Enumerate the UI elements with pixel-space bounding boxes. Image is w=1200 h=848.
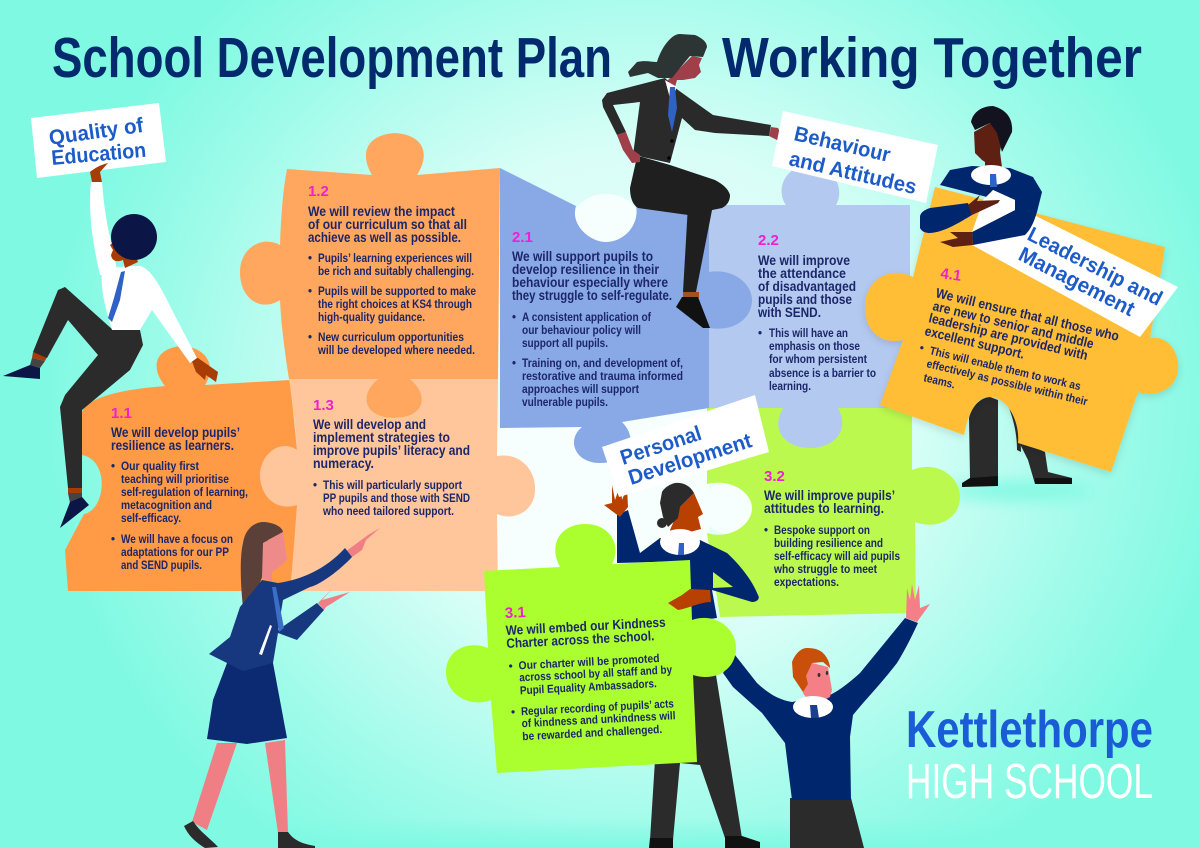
- text block 1.1: We will develop pupils’: [111, 425, 240, 440]
- text block 2.2: This will have an: [769, 328, 848, 340]
- text block 2.2: of disadvantaged: [758, 279, 856, 294]
- floor glow: [0, 818, 1200, 848]
- text block 1.1: metacognition and: [121, 500, 212, 512]
- person: top woman sitting: [602, 34, 786, 328]
- logo: [906, 701, 1153, 809]
- text block 3.1: •: [508, 661, 513, 673]
- text block 1.2: •: [308, 253, 312, 265]
- sign: leadership and management: Management: [1015, 243, 1138, 321]
- sign: quality of education: [31, 103, 166, 178]
- text block 2.1: 2.1: [512, 229, 533, 246]
- text block 1.3: PP pupils and those with SEND: [323, 493, 470, 505]
- text block 2.2: emphasis on those: [769, 341, 860, 353]
- person: man holding piece 4.1, torso and head: [920, 106, 1042, 247]
- text block 1.2: •: [308, 332, 312, 344]
- text block 1.1: •: [111, 461, 115, 473]
- text block 3.1: of kindness and unkindness will: [521, 710, 676, 730]
- sign: leadership and management: Leadership and: [1024, 223, 1166, 311]
- text block 4.1: This will enable them to work as: [928, 345, 1082, 393]
- text block 1.1: self-regulation of learning,: [121, 487, 248, 499]
- sign: personal development: Development: [626, 429, 755, 490]
- text block 2.1: our behaviour policy will: [522, 325, 641, 337]
- puzzle piece 3.2: [707, 408, 960, 617]
- text block 3.1: Our charter will be promoted: [518, 653, 660, 672]
- text block 2.2: pupils and those: [758, 292, 852, 307]
- text block 2.1: •: [512, 312, 516, 324]
- text block 4.1: •: [918, 342, 925, 355]
- text block 1.2: Pupils’ learning experiences will: [318, 253, 472, 265]
- sign: quality of education: Quality of: [47, 114, 146, 150]
- text block 3.2: We will improve pupils’: [764, 488, 895, 503]
- text block 1.3: This will particularly support: [323, 480, 462, 492]
- text block 2.1: Training on, and development of,: [522, 358, 683, 370]
- text block 2.2: with SEND.: [757, 305, 821, 320]
- text block 3.1: 3.1: [504, 604, 526, 622]
- text block 2.1: [512, 229, 683, 409]
- text block 4.1: effectively as possible within their: [925, 358, 1089, 409]
- text block 4.1: 4.1: [939, 265, 962, 285]
- text block 3.2: Bespoke support on: [774, 525, 870, 537]
- text block 4.1: leadership are provided with: [927, 310, 1089, 363]
- text block 3.1: be rewarded and challenged.: [522, 724, 662, 743]
- text block 3.1: •: [511, 707, 515, 719]
- text block 4.1: are new to senior and middle: [931, 298, 1096, 352]
- puzzle piece 1.2: [240, 133, 500, 418]
- sign: behaviour and attitudes: [772, 111, 938, 203]
- sign: personal development: [602, 395, 769, 497]
- sign: leadership and management: [972, 213, 1178, 337]
- sign: behaviour and attitudes: and Attitudes: [787, 147, 919, 199]
- text block 2.2: [757, 232, 876, 393]
- text block 3.2: [764, 468, 900, 589]
- text block 1.2: 1.2: [308, 183, 329, 200]
- text block 4.1: [918, 265, 1121, 409]
- text block 2.1: develop resilience in their: [512, 262, 660, 277]
- text block 1.1: self-efficacy.: [121, 513, 181, 525]
- puzzle piece 1.3: [260, 379, 535, 591]
- text block 2.1: vulnerable pupils.: [522, 397, 608, 409]
- text block 2.2: the attendance: [758, 266, 846, 281]
- text block 3.1: Pupil Equality Ambassadors.: [520, 678, 657, 697]
- text block 2.2: absence is a barrier to: [769, 368, 876, 380]
- text block 1.1: 1.1: [111, 405, 132, 422]
- person: man holding piece 4.1, legs: [962, 397, 1072, 487]
- text block 3.1: Regular recording of pupils’ acts: [521, 698, 674, 718]
- text block 1.3: implement strategies to: [313, 430, 450, 445]
- text block 1.3: [313, 397, 470, 518]
- hand on piece 3.1: [668, 589, 711, 610]
- text block 2.2: We will improve: [758, 253, 850, 268]
- text block 3.1: We will embed our Kindness: [505, 615, 666, 638]
- text block 3.2: expectations.: [774, 577, 839, 589]
- text block 3.2: self-efficacy will aid pupils: [774, 551, 900, 563]
- text block 1.1: adaptations for our PP: [121, 547, 229, 559]
- text block 1.2: Pupils will be supported to make: [318, 286, 476, 298]
- text block 1.1: Our quality first: [121, 461, 199, 473]
- text block 3.2: •: [764, 525, 768, 537]
- sign: quality of education: Education: [50, 139, 147, 170]
- text block 4.1: teams.: [922, 372, 956, 391]
- text block 3.1: across school by all staff and by: [519, 664, 673, 684]
- text block 2.2: 2.2: [758, 232, 779, 249]
- text block 2.2: for whom persistent: [769, 354, 867, 366]
- puzzle piece 1.1: [65, 346, 297, 591]
- text block 1.2: will be developed where needed.: [317, 345, 475, 357]
- text block 2.2: learning.: [769, 381, 811, 393]
- text block 3.1: [504, 596, 676, 744]
- text block 2.1: A consistent application of: [522, 312, 651, 324]
- text block 2.1: behaviour especially where: [512, 275, 668, 290]
- person: personal development woman: [604, 483, 760, 848]
- text block 1.2: the right choices at KS4 through: [318, 299, 472, 311]
- white puzzle piece: [497, 194, 754, 620]
- text block 2.2: •: [758, 328, 762, 340]
- puzzle piece 4.1: [865, 187, 1178, 472]
- ground shadow: [945, 482, 1095, 500]
- text block 1.3: We will develop and: [313, 417, 426, 432]
- text block 1.1: [111, 405, 248, 572]
- text block 2.1: they struggle to self-regulate.: [512, 288, 672, 303]
- text block 4.1: excellent support.: [923, 323, 1026, 362]
- text block 2.1: restorative and trauma informed: [522, 371, 683, 383]
- text block 2.1: We will support pupils to: [512, 249, 653, 264]
- person: boy with raised arms: [723, 584, 930, 848]
- text block 3.2: attitudes to learning.: [764, 501, 884, 516]
- text block 1.3: numeracy.: [313, 456, 374, 471]
- text block 1.2: high-quality guidance.: [318, 312, 425, 324]
- person: girl pointing: [184, 522, 380, 848]
- text block 1.2: be rich and suitably challenging.: [318, 266, 474, 278]
- text block 2.1: approaches will support: [522, 384, 639, 396]
- text block 1.1: resilience as learners.: [111, 438, 234, 453]
- text block 3.1: Charter across the school.: [506, 628, 655, 651]
- puzzle piece 3.1: [446, 524, 736, 773]
- sign: personal development: Personal: [617, 422, 704, 470]
- text block 1.1: teaching will prioritise: [121, 474, 229, 486]
- text block 1.2: [308, 183, 476, 357]
- text block 3.2: 3.2: [764, 468, 785, 485]
- text block 3.2: building resilience and: [774, 538, 883, 550]
- text block 1.3: •: [313, 480, 317, 492]
- sign: behaviour and attitudes: Behaviour: [792, 122, 893, 167]
- text block 1.3: 1.3: [313, 397, 334, 414]
- text block 1.2: New curriculum opportunities: [318, 332, 464, 344]
- text block 2.1: •: [512, 358, 516, 370]
- text block 1.3: improve pupils’ literacy and: [313, 443, 470, 458]
- text block 4.1: We will ensure that all those who: [934, 285, 1121, 344]
- text block 1.2: of our curriculum so that all: [308, 217, 467, 232]
- title left: School Development Plan: [52, 26, 612, 90]
- puzzle piece 2.1: [500, 168, 752, 463]
- text block 1.1: We will have a focus on: [121, 534, 233, 546]
- text block 1.1: •: [111, 534, 115, 546]
- title right: Working Together: [722, 26, 1142, 90]
- text block 1.2: achieve as well as possible.: [308, 230, 461, 245]
- text block 1.2: We will review the impact: [308, 204, 455, 219]
- person: quality of education boy: [3, 163, 218, 528]
- text block 1.3: who need tailored support.: [322, 506, 454, 518]
- puzzle piece 2.2: [709, 165, 910, 448]
- text block 3.2: who struggle to meet: [773, 564, 877, 576]
- text block 2.1: support all pupils.: [522, 338, 608, 350]
- text block 1.2: •: [308, 286, 312, 298]
- text block 1.1: and SEND pupils.: [121, 560, 202, 572]
